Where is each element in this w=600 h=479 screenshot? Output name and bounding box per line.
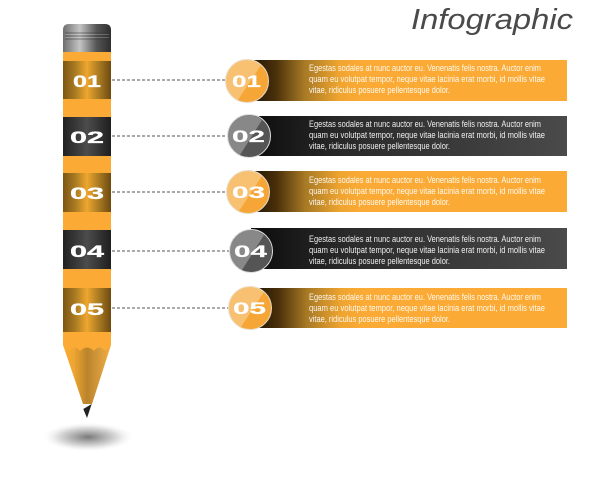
row 5: [228, 286, 567, 330]
badge 2: 02: [232, 127, 265, 146]
text 4: Egestas sodales at nunc auctor eu. Venenatis felis nostra. Auctor enim: [309, 234, 541, 244]
text 5: vitae, ridiculus posuere pellentesque dolor.: [309, 314, 450, 324]
pencil band 05: 05: [70, 300, 104, 319]
text 5: [309, 292, 545, 324]
text 1: Egestas sodales at nunc auctor eu. Venenatis felis nostra. Auctor enim: [309, 63, 541, 73]
row 4: [230, 228, 567, 272]
badge 3: 03: [232, 183, 265, 202]
text 3: vitae, ridiculus posuere pellentesque dolor.: [309, 197, 450, 207]
badge 4: [230, 230, 272, 272]
text 4: vitae, ridiculus posuere pellentesque dolor.: [309, 256, 450, 266]
pencil band 01: 01: [73, 72, 101, 91]
text 1: [309, 63, 545, 95]
badge 3: [226, 170, 270, 214]
pencil band 03: [63, 173, 111, 212]
pencil band 01: [63, 61, 111, 99]
text 5: quam eu volutpat tempor, neque vitae lacinia erat morbi, id mollis vitae: [309, 303, 545, 313]
text 1: quam eu volutpat tempor, neque vitae lacinia erat morbi, id mollis vitae: [309, 74, 545, 84]
text 2: [309, 119, 545, 151]
badge 5: [228, 286, 272, 330]
pencil band 04: [63, 230, 111, 269]
text 2: vitae, ridiculus posuere pellentesque dolor.: [309, 141, 450, 151]
text 2: Egestas sodales at nunc auctor eu. Venenatis felis nostra. Auctor enim: [309, 119, 541, 129]
text 1: vitae, ridiculus posuere pellentesque dolor.: [309, 85, 450, 95]
connector lines: [112, 80, 229, 308]
title: Infographic: [411, 4, 574, 36]
pencil band 02: 02: [70, 128, 104, 147]
badge 4: 04: [234, 242, 268, 261]
pencil band 02: [63, 117, 111, 156]
bar 5: [250, 288, 567, 328]
badge 1: 01: [232, 72, 261, 91]
pencil band 03: 03: [70, 184, 104, 203]
text 5: Egestas sodales at nunc auctor eu. Venenatis felis nostra. Auctor enim: [309, 292, 541, 302]
bar 4: [251, 228, 567, 269]
text 3: Egestas sodales at nunc auctor eu. Venenatis felis nostra. Auctor enim: [309, 175, 541, 185]
bar 2: [249, 116, 567, 156]
pencil band 04: 04: [70, 242, 105, 261]
pencil tip cone: [63, 345, 111, 404]
pencil band 05: [63, 288, 111, 332]
row 2: [228, 114, 567, 158]
pencil barrel: [63, 52, 111, 351]
bar 3: [248, 171, 567, 212]
pencil lead: [83, 404, 92, 418]
badge 1: [226, 60, 268, 102]
pencil eraser: [63, 24, 111, 52]
pencil: [63, 24, 111, 418]
bar 1: [247, 60, 567, 101]
pencil shadow: [41, 422, 135, 452]
text 4: quam eu volutpat tempor, neque vitae lacinia erat morbi, id mollis vitae: [309, 245, 545, 255]
text 2: quam eu volutpat tempor, neque vitae lacinia erat morbi, id mollis vitae: [309, 130, 545, 140]
text 4: [309, 234, 545, 266]
badge 5: 05: [233, 299, 266, 318]
row 3: [226, 170, 567, 214]
text 3: quam eu volutpat tempor, neque vitae lacinia erat morbi, id mollis vitae: [309, 186, 545, 196]
text 3: [309, 175, 545, 207]
badge 2: [228, 114, 270, 158]
row 1: [226, 60, 567, 102]
